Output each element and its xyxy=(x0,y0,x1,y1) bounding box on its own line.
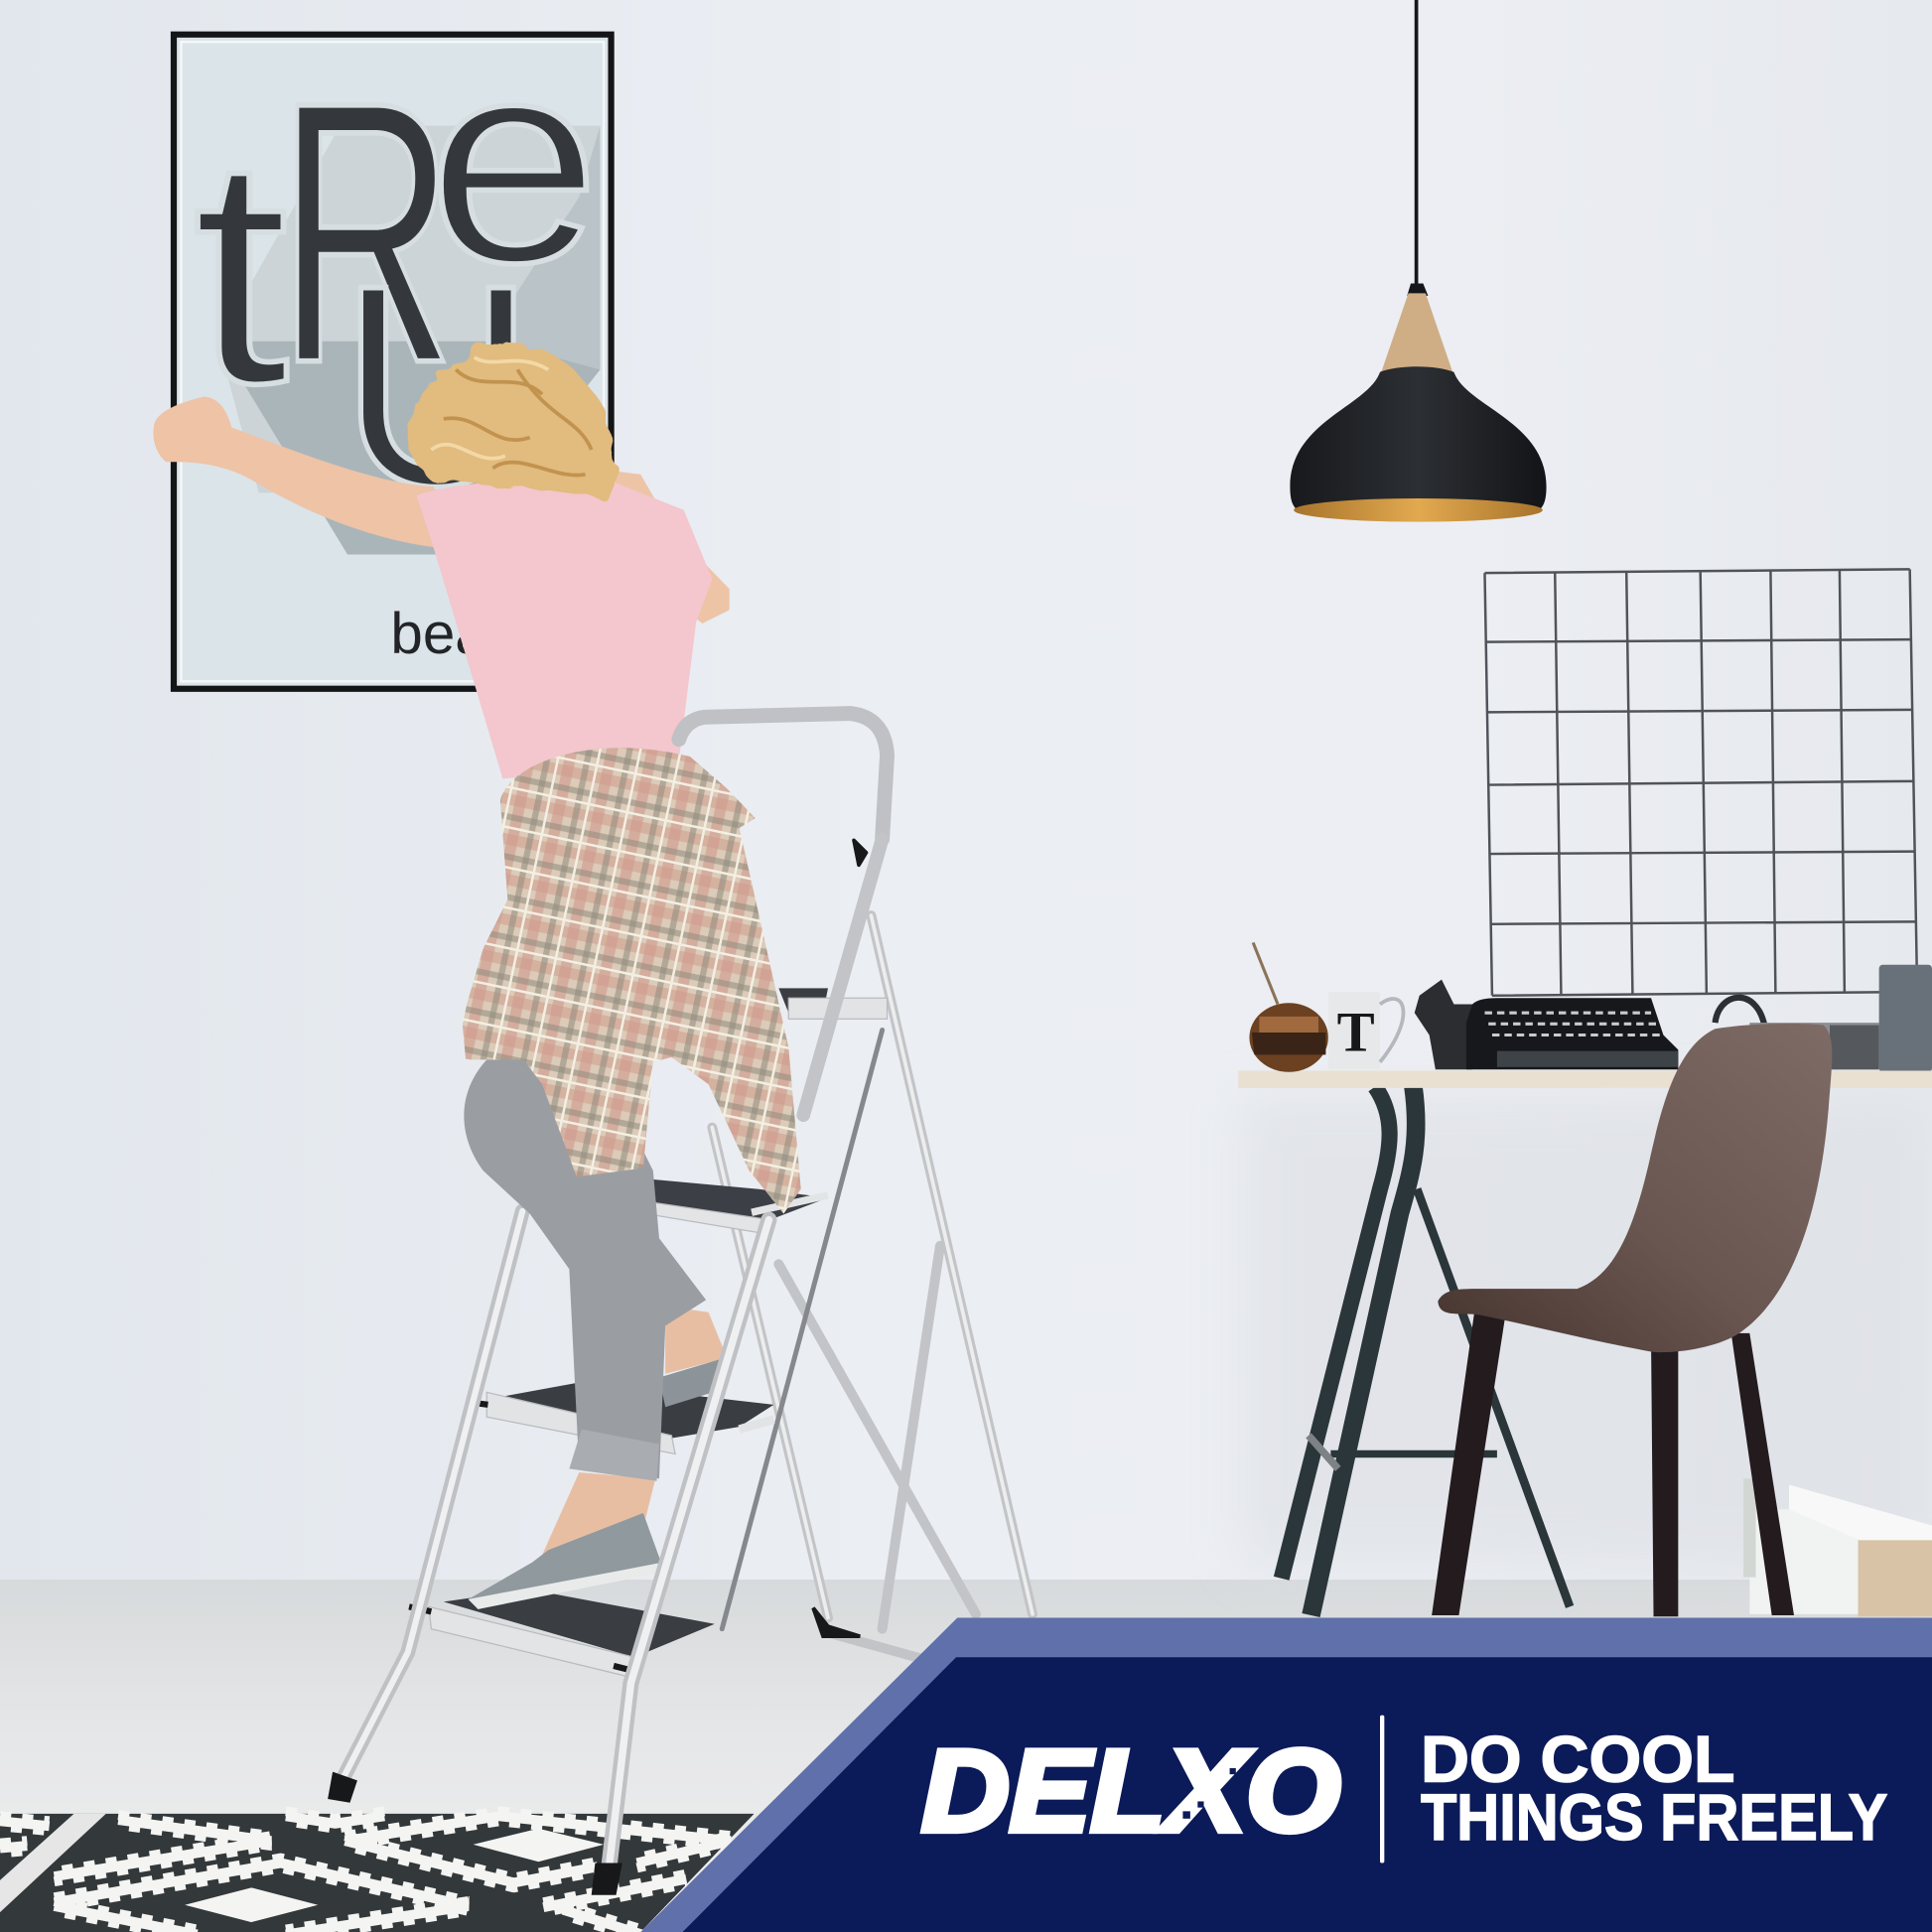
right shelf objects xyxy=(1716,965,1932,1072)
rug zigzag pattern xyxy=(0,1811,731,1932)
banner divider xyxy=(1380,1716,1384,1863)
jeans xyxy=(464,1011,706,1478)
poster lettering xyxy=(193,0,600,546)
storage boxes bottom right xyxy=(1743,1478,1932,1616)
rug xyxy=(0,1811,755,1932)
chair legs xyxy=(1432,1309,1794,1616)
ladder right foot xyxy=(592,1863,622,1895)
ladder step three xyxy=(469,1382,773,1453)
poster lettering: R xyxy=(277,26,455,441)
neck xyxy=(592,469,665,517)
rug border stripe xyxy=(0,1814,106,1912)
logo sparkle particles xyxy=(1182,1749,1236,1819)
back shoe xyxy=(659,1359,721,1407)
desk xyxy=(1238,1070,1932,1615)
wall shadow behind desk xyxy=(1244,1097,1932,1565)
blonde hair xyxy=(413,343,618,499)
poster xyxy=(174,0,612,689)
mug with letter T: T xyxy=(1337,1002,1375,1064)
typewriter xyxy=(1415,980,1678,1069)
lower shoe xyxy=(469,1513,663,1609)
mug with letter T xyxy=(1328,992,1403,1069)
wire wall grid xyxy=(1484,569,1917,996)
ladder right rail and handrail xyxy=(608,714,888,1880)
back leg foot and ankle xyxy=(665,1307,727,1374)
poster lettering: e xyxy=(428,0,600,324)
desk legs xyxy=(1282,1087,1570,1615)
folding foot xyxy=(813,1608,860,1636)
jeans cuff xyxy=(569,1430,659,1481)
banner navy panel xyxy=(683,1657,1932,1932)
DELXO logo: DELXO xyxy=(921,1725,1340,1856)
lower ankle xyxy=(542,1472,655,1555)
tagline: DO COOL xyxy=(1421,1723,1734,1796)
plaid shirt around waist xyxy=(462,748,801,1213)
desk top xyxy=(1238,1070,1932,1088)
poster lettering: t xyxy=(193,90,290,451)
ladder step two xyxy=(650,1179,828,1235)
banner light band xyxy=(640,1618,1932,1932)
gourd cup with straw xyxy=(1249,942,1328,1072)
poster lettering: U xyxy=(341,226,534,546)
raised arm and hand xyxy=(153,397,444,548)
poster small text: bea xyxy=(390,602,487,666)
right forearm xyxy=(678,548,730,623)
chair shell xyxy=(1438,1024,1832,1352)
ladder top step xyxy=(778,988,888,1019)
step ladder back frame xyxy=(712,915,1033,1660)
floor xyxy=(0,1580,1932,1932)
tagline: THINGS FREELY xyxy=(1421,1780,1887,1854)
tagline xyxy=(1421,1723,1887,1854)
ladder left front rail xyxy=(342,1211,522,1782)
pendant lamp xyxy=(1290,0,1547,522)
chair xyxy=(1432,1024,1832,1616)
woman xyxy=(153,343,801,1609)
ladder step four xyxy=(409,1589,715,1678)
pink t-shirt xyxy=(416,479,712,778)
ladder left foot xyxy=(328,1772,357,1803)
rear legs and braces xyxy=(712,915,1033,1660)
